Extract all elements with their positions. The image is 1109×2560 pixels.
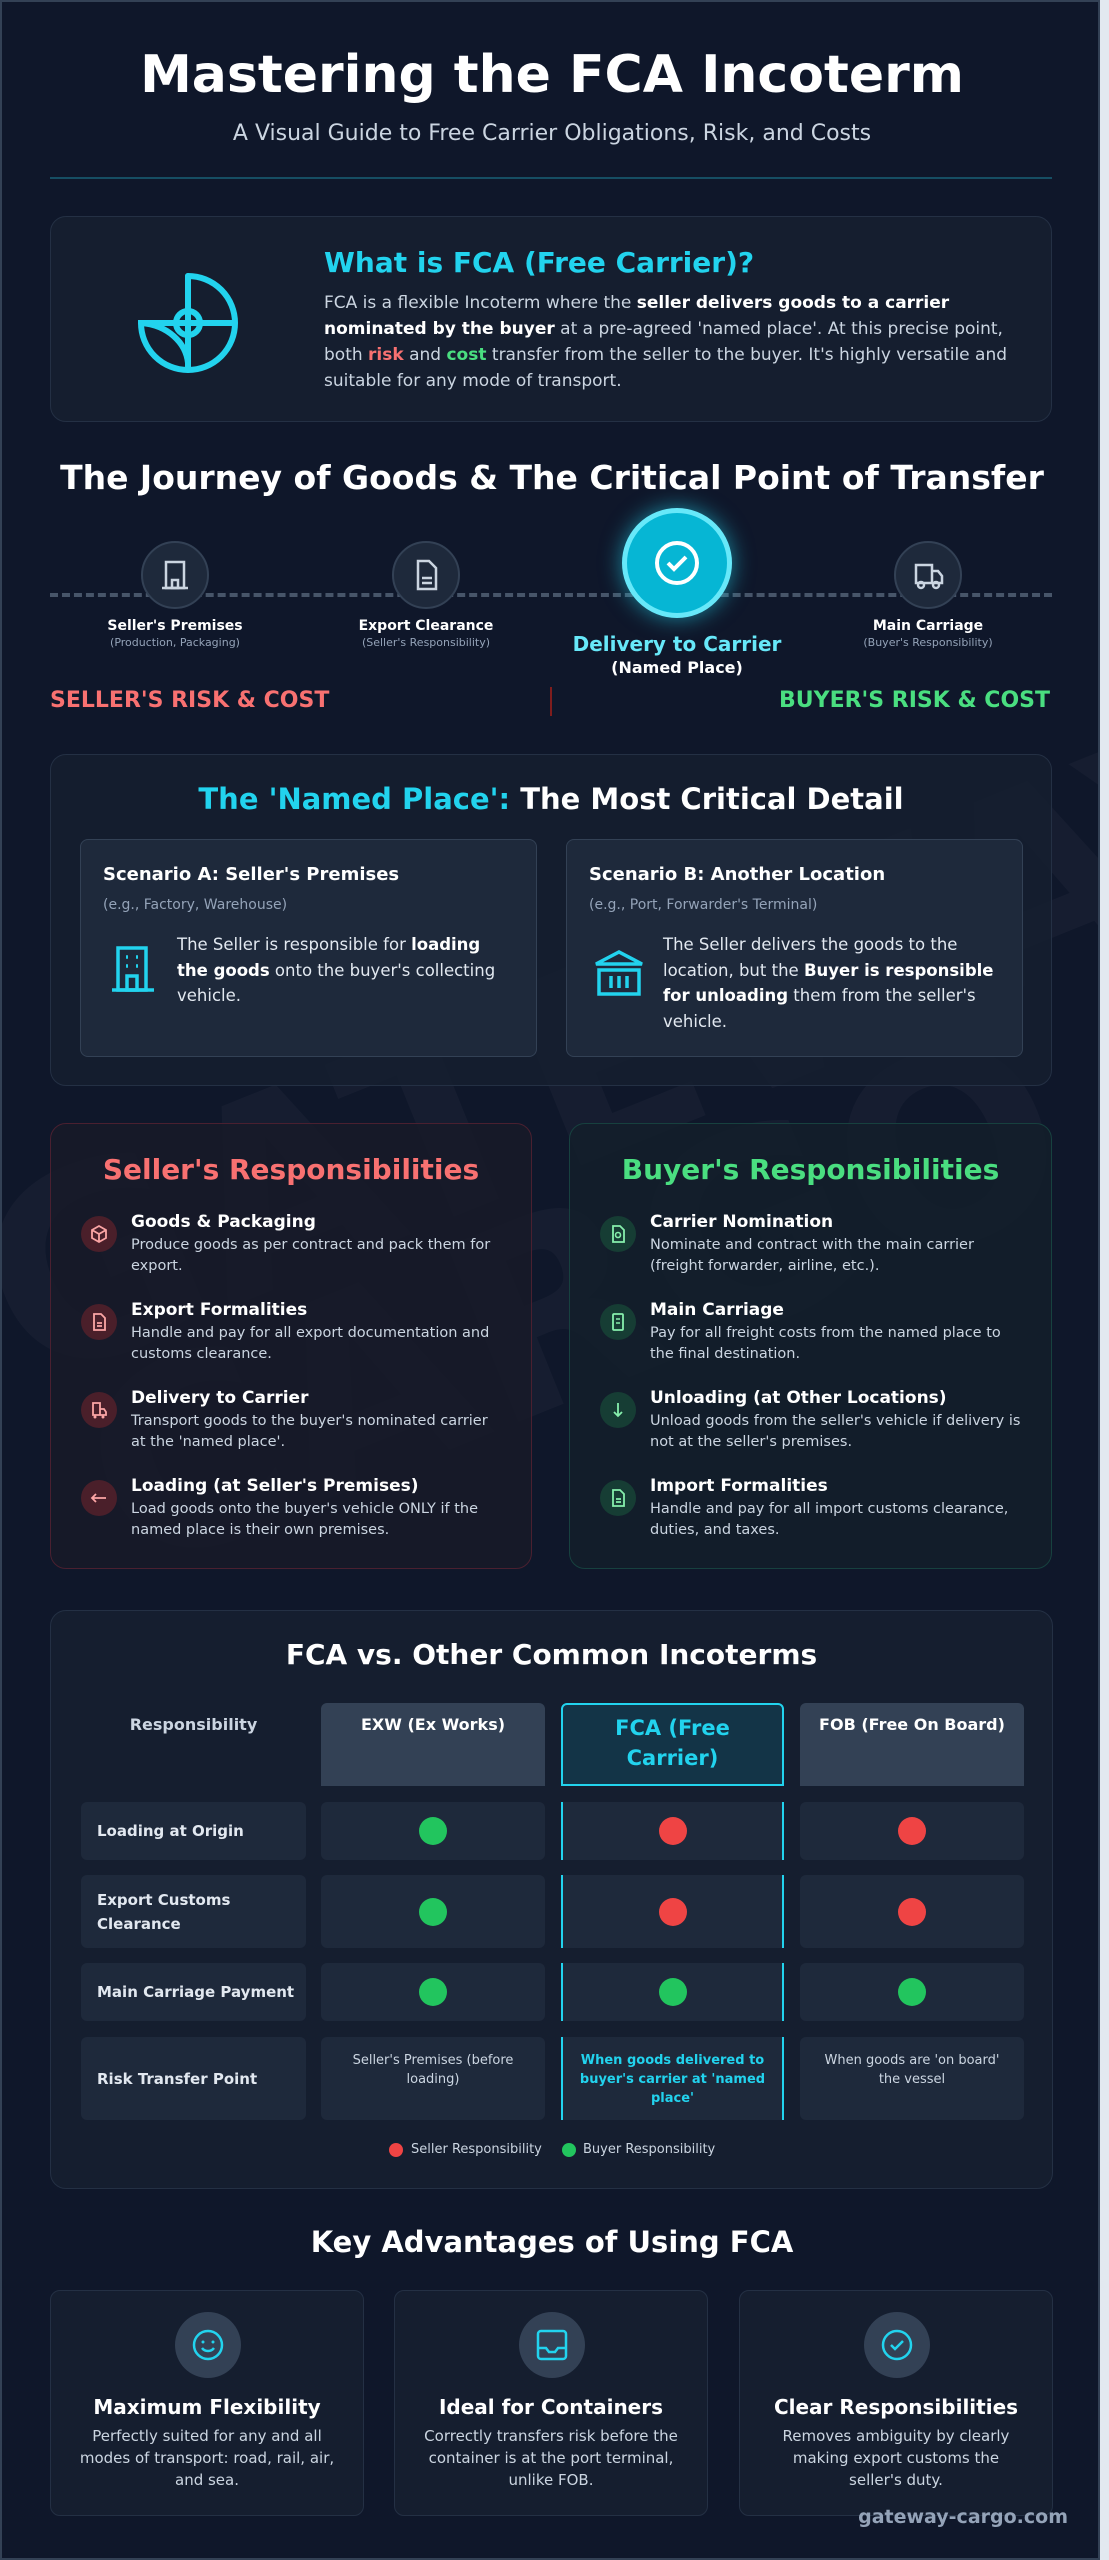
row: risk transfer: Risk Transfer Point (97, 2070, 257, 2088)
row: export customs (81, 1875, 1024, 1948)
item: delivery to carrier: Transport goods to the buyer's nominated carrier at the 'named place'. (131, 1413, 488, 1450)
seller risk label: SELLER'S RISK & COST (50, 688, 329, 713)
heading: journey: The Journey of Goods & The Critical Point of Transfer (60, 458, 1044, 497)
item: unloading: Unloading (at Other Locations) (650, 1388, 947, 1408)
panel: buyer responsibilities: Buyer's Responsibilities (622, 1153, 999, 1186)
item: export formalities: Export Formalities (131, 1300, 307, 1320)
item: main carriage: Main Carriage (650, 1300, 784, 1320)
step 4 (863, 541, 993, 649)
item: goods & packaging: Goods & Packaging (131, 1212, 316, 1232)
item: import formalities: Import Formalities (650, 1476, 828, 1496)
item: loading: Loading (at Seller's Premises) (131, 1476, 418, 1496)
item: carrier nomination (600, 1212, 974, 1274)
panel: comparison table: FCA (Free (615, 1716, 730, 1740)
item: goods & packaging: Produce goods as per contract and pack them for export. (131, 1237, 490, 1274)
step 1: Seller's Premises (107, 618, 243, 634)
card: ideal for containers (394, 2290, 708, 2516)
panel: named place (50, 754, 1052, 1086)
row: risk transfer: Seller's Premises (before loading) (353, 2053, 513, 2087)
row: loading at origin: Loading at Origin (97, 1822, 244, 1840)
scenario A: (e.g., Factory, Warehouse) (103, 897, 287, 913)
step 3: delivery to carrier (573, 494, 782, 677)
item: loading (81, 1476, 478, 1538)
step 4: Main Carriage (873, 618, 983, 634)
legend: Seller Responsibility (411, 2142, 542, 2157)
panel: comparison table: FOB (Free On Board) (819, 1715, 1005, 1734)
panel: comparison table: Carrier) (627, 1746, 718, 1770)
panel: buyer responsibilities (569, 1123, 1052, 1569)
icon: building (112, 946, 154, 992)
item: carrier nomination: Nominate and contract with the main carrier (freight forwarder, airline, etc.). (650, 1237, 974, 1274)
step 2: Export Clearance (359, 618, 493, 634)
scenario B: Scenario B: Another Location (589, 864, 885, 885)
step 2 (359, 541, 493, 649)
step 3: delivery to carrier: (Named Place) (611, 658, 743, 677)
card: clear responsibilities (739, 2290, 1053, 2516)
item: loading: Load goods onto the buyer's vehicle ONLY if the named place is their own premises. (131, 1501, 478, 1538)
card: ideal for containers: Ideal for Containers (439, 2395, 663, 2419)
panel: seller responsibilities: Seller's Responsibilities (103, 1153, 479, 1186)
title: Mastering the FCA Incoterm (140, 45, 964, 105)
step 1: (Production, Packaging) (110, 636, 240, 649)
step 3: delivery to carrier: Delivery to Carrier (573, 632, 781, 656)
card: ideal for containers: Correctly transfers risk before the container is at the port terminal, unlike FOB. (424, 2427, 678, 2489)
row: export customs: Export Customs (97, 1890, 230, 1908)
item: unloading: Unload goods from the seller's vehicle if delivery is not at the seller's premises. (650, 1413, 1020, 1450)
watermark: CARGO (43, 971, 1100, 1635)
card: clear responsibilities: Removes ambiguity by clearly making export customs the seller's duty. (783, 2427, 1009, 2489)
scenario B (566, 839, 1023, 1057)
header row: Responsibility (130, 1715, 257, 1734)
scenario B: (e.g., Port, Forwarder's Terminal) (589, 897, 817, 913)
heading: What is FCA (Free Carrier)? (324, 246, 754, 279)
timeline (50, 494, 1052, 677)
row: loading at origin (81, 1802, 1024, 1860)
scenario A (80, 839, 537, 1057)
item: goods & packaging (81, 1212, 490, 1274)
item: delivery to carrier: Delivery to Carrier (131, 1388, 308, 1408)
card: maximum flexibility: Perfectly suited for any and all modes of transport: road, rail, air, and sea. (80, 2427, 334, 2489)
card: clear responsibilities: Clear Responsibilities (774, 2395, 1018, 2419)
item: export formalities: Handle and pay for all export documentation and customs clearance. (131, 1325, 489, 1362)
row: main carriage (81, 1963, 1024, 2021)
item: main carriage: Pay for all freight costs from the named place to the final destination. (650, 1325, 1001, 1362)
panel: comparison table (50, 1610, 1053, 2189)
heading: FCA vs. Other Common Incoterms (286, 1638, 817, 1671)
step 1 (107, 541, 243, 649)
item: import formalities: Handle and pay for all import customs clearance, duties, and taxes. (650, 1501, 1008, 1538)
item: unloading (600, 1388, 1020, 1450)
step 4: (Buyer's Responsibility) (863, 636, 993, 649)
row: main carriage: Main Carriage Payment (97, 1983, 294, 2001)
item: carrier nomination: Carrier Nomination (650, 1212, 833, 1232)
row: export customs: Clearance (97, 1914, 181, 1932)
step 2: (Seller's Responsibility) (362, 636, 490, 649)
panel: comparison table: EXW (Ex Works) (361, 1715, 505, 1734)
body text: FCA is a flexible Incoterm where the seller delivers goods to a carrier nominated by the buyer at a pre-agreed 'named place'. At this precise point, both risk and cost transfer from the seller to the buyer. It's highly versatile and suitable for any mode of transport. (324, 293, 1007, 391)
row: risk transfer: When goods are 'on board' the vessel (825, 2053, 999, 2087)
panel: what is FCA (50, 216, 1052, 422)
scenario A: Scenario A: Seller's Premises (103, 864, 399, 885)
panel: seller responsibilities (50, 1123, 532, 1569)
item: delivery to carrier (81, 1388, 488, 1450)
legend (389, 2142, 715, 2157)
heading: key advantages: Key Advantages of Using FCA (311, 2225, 793, 2259)
row: risk transfer: When goods delivered to buyer's carrier at 'named place' (580, 2053, 765, 2106)
card: maximum flexibility: Maximum Flexibility (93, 2395, 321, 2419)
icon: bank/terminal (595, 950, 643, 996)
scenario A: The Seller is responsible for loading the goods onto the buyer's collecting vehicle. (177, 935, 495, 1005)
item: export formalities (81, 1300, 489, 1362)
legend: Buyer Responsibility (583, 2142, 715, 2157)
subtitle: A Visual Guide to Free Carrier Obligations, Risk, and Costs (233, 121, 871, 146)
card: maximum flexibility (50, 2290, 364, 2516)
buyer risk label: BUYER'S RISK & COST (779, 688, 1050, 713)
footer brand: gateway-cargo.com (858, 2506, 1068, 2528)
scenario B: The Seller delivers the goods to the location, but the Buyer is responsible for unloading them from the seller's vehicle. (663, 935, 994, 1031)
item: import formalities (600, 1476, 1008, 1538)
heading: The 'Named Place': The Most Critical Detail (198, 782, 904, 816)
item: main carriage (600, 1300, 1001, 1362)
icon: FCA compass (138, 273, 238, 373)
row: risk transfer (81, 2037, 1024, 2120)
